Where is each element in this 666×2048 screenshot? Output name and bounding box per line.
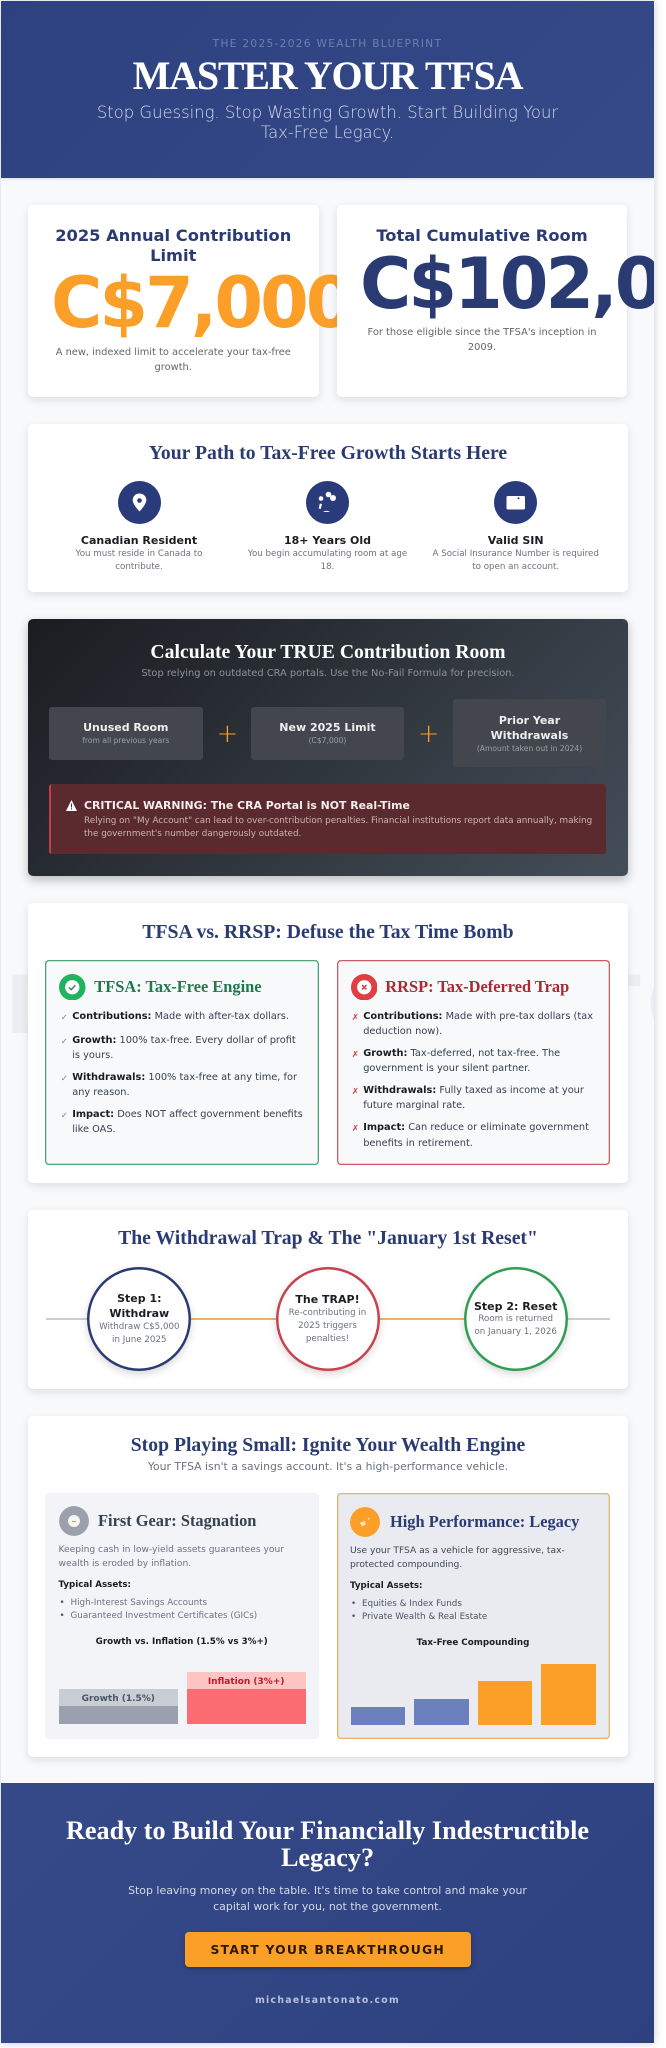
subtitle: Tax-Free Legacy. xyxy=(261,123,394,142)
assets label: Typical Assets: xyxy=(58,1580,131,1590)
plus sign: + xyxy=(418,719,440,749)
list item: is yours. xyxy=(72,1050,113,1061)
list item xyxy=(61,1072,298,1098)
list item: any reason. xyxy=(72,1087,130,1098)
card title: Limit xyxy=(150,246,196,265)
list item: future marginal rate. xyxy=(363,1100,465,1111)
description xyxy=(350,1546,565,1570)
chart title: Tax-Free Compounding xyxy=(417,1638,529,1648)
card note: 2009. xyxy=(468,342,496,353)
list item: Growth: Tax-deferred, not tax-free. The xyxy=(363,1048,560,1059)
heading: Your Path to Tax-Free Growth Starts Here xyxy=(149,442,507,464)
icon: people xyxy=(306,481,349,524)
eyebrow: THE 2025-2026 WEALTH BLUEPRINT xyxy=(213,38,442,50)
list item: benefits in retirement. xyxy=(363,1138,473,1149)
column: RRSP: ✗ xyxy=(352,1087,359,1097)
column: high performance xyxy=(336,1493,610,1739)
assets label: Typical Assets: xyxy=(350,1581,423,1591)
item: age xyxy=(248,481,407,572)
bar label: Growth (1.5%) xyxy=(82,1694,155,1704)
list item xyxy=(61,1109,303,1135)
icon: check badge xyxy=(59,974,86,1000)
label xyxy=(491,714,568,742)
list item: Contributions: Made with after-tax dollars. xyxy=(72,1011,289,1022)
step text: Room is returned xyxy=(478,1314,553,1324)
item description: to open an account. xyxy=(472,562,559,572)
item description xyxy=(76,549,202,572)
big number: C$7,000 xyxy=(51,262,352,344)
column: RRSP: ✗ xyxy=(352,1013,359,1023)
stat card: annual limit xyxy=(28,205,318,397)
subtitle xyxy=(97,103,558,142)
step text xyxy=(474,1314,557,1337)
item title: Canadian Resident xyxy=(81,534,197,547)
card note xyxy=(56,347,291,373)
header banner xyxy=(1,1,654,178)
list item: deduction now). xyxy=(363,1026,442,1037)
card note: A new, indexed limit to accelerate your tax-free xyxy=(56,347,291,358)
column: RRSP: ✗ xyxy=(352,1124,359,1134)
sublabel: (Amount taken out in 2024) xyxy=(477,744,582,753)
item description xyxy=(432,549,599,572)
subheading: Your TFSA isn't a savings account. It's a high-performance vehicle. xyxy=(148,1460,508,1473)
step title xyxy=(109,1292,169,1320)
warning title: CRITICAL WARNING: The CRA Portal is NOT Real-Time xyxy=(84,799,410,812)
list item xyxy=(352,1048,560,1074)
heading: Legacy? xyxy=(281,1843,374,1872)
bar label xyxy=(58,1689,178,1706)
description xyxy=(58,1545,284,1569)
step title: Step 1: xyxy=(117,1292,162,1305)
icon: rocket xyxy=(350,1507,380,1537)
warning text: the government's number dangerously outdated. xyxy=(84,829,301,839)
bar: growth xyxy=(58,1689,178,1724)
bar label xyxy=(186,1672,306,1689)
item description: 18. xyxy=(321,562,334,572)
footer call to action xyxy=(1,1783,654,2043)
icon: id card xyxy=(494,481,537,524)
icon: cross badge xyxy=(351,974,377,1000)
column title: First Gear: Stagnation xyxy=(98,1511,256,1530)
label: Prior Year xyxy=(499,714,560,727)
bar label: Inflation (3%+) xyxy=(208,1677,284,1687)
card title: Total Cumulative Room xyxy=(376,226,588,245)
item title: 18+ Years Old xyxy=(284,534,371,547)
website: michaelsantonato.com xyxy=(255,1995,400,2006)
bar: inflation xyxy=(186,1672,306,1724)
step text: penalties! xyxy=(306,1334,349,1344)
heading: Calculate Your TRUE Contribution Room xyxy=(150,641,506,663)
list item: Impact: Can reduce or eliminate government xyxy=(363,1122,589,1133)
list item: government is your silent partner. xyxy=(363,1063,530,1074)
list item xyxy=(352,1122,589,1149)
label: Unused Room xyxy=(83,721,168,734)
title: MASTER YOUR TFSA xyxy=(133,53,522,98)
panel: TFSA vs RRSP xyxy=(28,903,628,1183)
list item xyxy=(352,1011,593,1037)
heading: The Withdrawal Trap & The "January 1st Reset" xyxy=(118,1227,538,1249)
text: capital work for you, not the government. xyxy=(213,1900,442,1913)
subheading: Stop relying on outdated CRA portals. Use the No-Fail Formula for precision. xyxy=(141,668,515,679)
panel: wealth engine xyxy=(28,1416,628,1757)
list item xyxy=(352,1085,584,1111)
step title: The TRAP! xyxy=(295,1293,360,1306)
column: TFSA: ✓ xyxy=(61,1013,68,1023)
step text xyxy=(289,1308,366,1344)
formula: prior withdrawals xyxy=(453,699,606,767)
heading xyxy=(66,1816,589,1872)
bar chart xyxy=(351,1664,596,1725)
icon: warning triangle xyxy=(66,800,77,811)
list item: Withdrawals: 100% tax-free at any time, for xyxy=(72,1072,297,1083)
button: START YOUR BREAKTHROUGH xyxy=(210,1942,445,1957)
timeline line xyxy=(46,1318,610,1320)
step title: Step 2: Reset xyxy=(474,1300,557,1312)
list item: Impact: Does NOT affect government benefits xyxy=(72,1109,303,1120)
label: New 2025 Limit xyxy=(279,721,376,734)
icon: gauge xyxy=(59,1506,89,1536)
step text: on January 1, 2026 xyxy=(474,1327,557,1337)
column: TFSA: ✓ xyxy=(61,1111,68,1121)
list xyxy=(352,1011,593,1149)
column title: TFSA: Tax-Free Engine xyxy=(94,977,262,996)
sublabel: from all previous years xyxy=(82,736,169,745)
warning text xyxy=(84,816,592,839)
text xyxy=(128,1884,527,1913)
column: TFSA: ✓ xyxy=(61,1074,68,1084)
asset item: Guaranteed Investment Certificates (GICs) xyxy=(70,1611,257,1621)
item description: You must reside in Canada to xyxy=(76,549,202,559)
card note: growth. xyxy=(155,362,192,373)
heading: TFSA vs. RRSP: Defuse the Tax Time Bomb xyxy=(142,921,514,943)
list item: Contributions: Made with pre-tax dollars (tax xyxy=(363,1011,593,1022)
column: TFSA: ✓ xyxy=(61,1037,68,1047)
asset item: Private Wealth & Real Estate xyxy=(362,1612,487,1622)
step: withdraw xyxy=(87,1267,191,1371)
column title: High Performance: Legacy xyxy=(390,1512,579,1531)
description: wealth is eroded by inflation. xyxy=(58,1559,191,1569)
button xyxy=(185,1932,471,1967)
step text: in June 2025 xyxy=(112,1335,167,1345)
sublabel: (C$7,000) xyxy=(309,736,346,745)
formula: new limit xyxy=(251,707,404,760)
column: RRSP xyxy=(336,960,610,1165)
label: Withdrawals xyxy=(491,729,568,742)
description: Use your TFSA as a vehicle for aggressive, tax- xyxy=(350,1546,565,1556)
column: first gear xyxy=(45,1493,318,1739)
column: RRSP: ✗ xyxy=(352,1050,359,1060)
item description xyxy=(248,549,407,572)
step text: Withdraw C$5,000 xyxy=(99,1322,180,1332)
callout: CRA warning xyxy=(49,784,606,854)
list xyxy=(61,1011,303,1135)
asset item: High-Interest Savings Accounts xyxy=(70,1598,207,1608)
step text: Re-contributing in xyxy=(289,1308,366,1318)
plus sign: + xyxy=(216,719,238,749)
subtitle: Stop Guessing. Stop Wasting Growth. Start Building Your xyxy=(97,103,558,122)
list item: like OAS. xyxy=(72,1124,116,1135)
stat card: cumulative room xyxy=(337,205,627,397)
item description: contribute. xyxy=(115,562,163,572)
card note: For those eligible since the TFSA's inception in xyxy=(368,327,596,338)
step: reset xyxy=(464,1267,568,1371)
step: trap xyxy=(276,1267,380,1371)
heading: Stop Playing Small: Ignite Your Wealth Engine xyxy=(131,1434,525,1456)
background watermark text xyxy=(5,961,654,1051)
card note xyxy=(368,327,596,353)
description: protected compounding. xyxy=(350,1560,462,1570)
list item: Withdrawals: Fully taxed as income at your xyxy=(363,1085,584,1096)
item: SIN xyxy=(432,481,599,572)
item title: Valid SIN xyxy=(488,534,544,547)
item: resident xyxy=(76,481,202,572)
item description: You begin accumulating room at age xyxy=(248,549,407,559)
formula: unused room xyxy=(49,707,203,760)
column: TFSA xyxy=(45,960,318,1165)
list item: Growth: 100% tax-free. Every dollar of profit xyxy=(72,1035,296,1046)
warning text: Relying on "My Account" can lead to over-contribution penalties. Financial institutions report data annually, making xyxy=(84,816,592,826)
panel: withdrawal timeline xyxy=(28,1210,628,1389)
text: Stop leaving money on the table. It's time to take control and make your xyxy=(128,1884,527,1897)
item description: A Social Insurance Number is required xyxy=(432,549,599,559)
panel: eligibility xyxy=(28,424,628,592)
heading: Ready to Build Your Financially Indestructible xyxy=(66,1816,589,1845)
list item xyxy=(61,1035,296,1061)
description: Keeping cash in low-yield assets guarantees your xyxy=(58,1545,284,1555)
panel: contribution room formula xyxy=(28,619,628,876)
card title xyxy=(55,226,291,265)
chart title: Growth vs. Inflation (1.5% vs 3%+) xyxy=(96,1637,268,1647)
column title: RRSP: Tax-Deferred Trap xyxy=(385,977,569,996)
step text xyxy=(99,1322,180,1345)
step title: Withdraw xyxy=(109,1307,169,1320)
step text: 2025 triggers xyxy=(298,1320,357,1330)
icon: map pin xyxy=(118,481,161,524)
asset item: Equities & Index Funds xyxy=(362,1599,462,1609)
card title: 2025 Annual Contribution xyxy=(55,226,291,245)
